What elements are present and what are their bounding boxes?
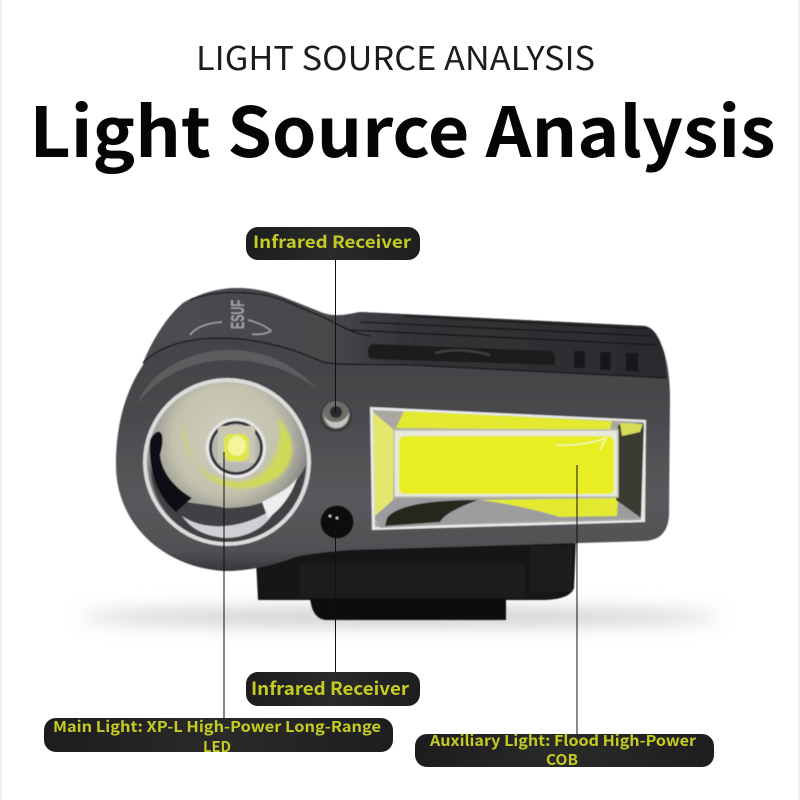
leader line: auxiliary light: [576, 465, 578, 736]
label: main light: LED: [203, 736, 231, 757]
ground shadow: [80, 609, 720, 625]
top shell: [143, 288, 667, 378]
subtitle: LIGHT SOURCE ANALYSIS: [196, 32, 595, 80]
logo mark: [190, 300, 271, 335]
label: auxiliary light: [415, 730, 714, 770]
LED emitter: [206, 418, 266, 478]
infrared receiver bottom: [320, 506, 354, 538]
title: Light Source Analysis: [30, 77, 776, 177]
label: infrared receiver bottom: [246, 672, 420, 706]
leader line: bottom infrared: [334, 530, 336, 674]
leader line: main light: [223, 452, 225, 720]
COB panel: [394, 430, 618, 497]
clip mount: [256, 540, 576, 620]
COB floodlight: [370, 407, 646, 530]
power button: [368, 344, 555, 365]
label: main light: Main Light: XP-L High-Power Long-Range: [53, 716, 381, 737]
indicator slots: [574, 351, 638, 371]
label: infrared receiver top: Infrared Receiver: [253, 228, 412, 253]
label: infrared receiver bottom: Infrared Receiver: [251, 675, 409, 701]
label: infrared receiver top: [246, 227, 420, 260]
lamp body: [116, 288, 670, 571]
label: auxiliary light: COB: [546, 749, 578, 770]
leader line: top infrared: [334, 258, 336, 412]
label: auxiliary light: Auxiliary Light: Flood High-Power: [429, 730, 696, 751]
logo mark: ESUF: [228, 300, 248, 329]
lens surround highlight: [137, 350, 318, 405]
photo: headlamp: [116, 288, 670, 620]
label: main light: [44, 716, 393, 757]
infrared emitter top: [320, 400, 352, 432]
shell ridges: [143, 292, 667, 378]
main light reflector: [143, 378, 311, 546]
